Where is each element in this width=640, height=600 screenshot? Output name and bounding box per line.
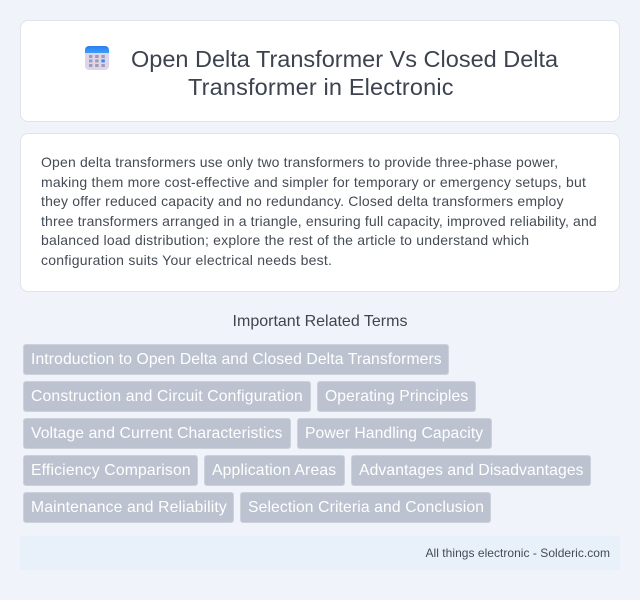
tag: Power Handling Capacity [305, 425, 483, 442]
summary text: making them more cost-effective and simpler for temporary or emergency setups, but [41, 174, 586, 190]
tag [240, 492, 491, 523]
panel: title card [20, 20, 620, 122]
tag [23, 344, 449, 375]
heading: related terms: Important Related Terms [233, 313, 407, 330]
tag: Application Areas [212, 462, 336, 479]
tag: Operating Principles [325, 388, 468, 405]
icon: calendar [85, 46, 109, 70]
tag [23, 492, 234, 523]
tag: Selection Criteria and Conclusion [248, 499, 484, 516]
panel: summary card [20, 133, 620, 292]
tag: Construction and Circuit Configuration [31, 388, 303, 405]
tag: Maintenance and Reliability [31, 499, 227, 516]
summary text: Open delta transformers use only two transformers to provide three-phase power, [41, 154, 558, 170]
tag: Introduction to Open Delta and Closed Delta Transformers [31, 351, 442, 368]
tag [23, 455, 198, 486]
title: Transformer in Electronic [188, 74, 454, 100]
tag: Efficiency Comparison [31, 462, 191, 479]
summary text: three transformers arranged in a triangle, ensuring full capacity, improved reliability, and [41, 213, 597, 229]
title: Open Delta Transformer Vs Closed Delta [131, 46, 558, 72]
tag [204, 455, 345, 486]
summary text: balanced load distribution; explore the rest of the article to understand which [41, 232, 529, 248]
title [131, 46, 558, 100]
summary text: they offer reduced capacity and no redundancy. Closed delta transformers employ [41, 193, 564, 209]
tag: Voltage and Current Characteristics [31, 425, 282, 442]
footer bar [20, 536, 620, 570]
footer credit: All things electronic - Solderic.com [426, 546, 610, 560]
tag [297, 418, 492, 449]
tag [23, 418, 291, 449]
summary text [41, 154, 597, 268]
tag [23, 381, 311, 412]
panel: related term tags [23, 344, 591, 523]
tag [317, 381, 476, 412]
tag: Advantages and Disadvantages [359, 462, 584, 479]
tag [351, 455, 591, 486]
summary text: configuration suits Your electrical needs best. [41, 252, 332, 268]
